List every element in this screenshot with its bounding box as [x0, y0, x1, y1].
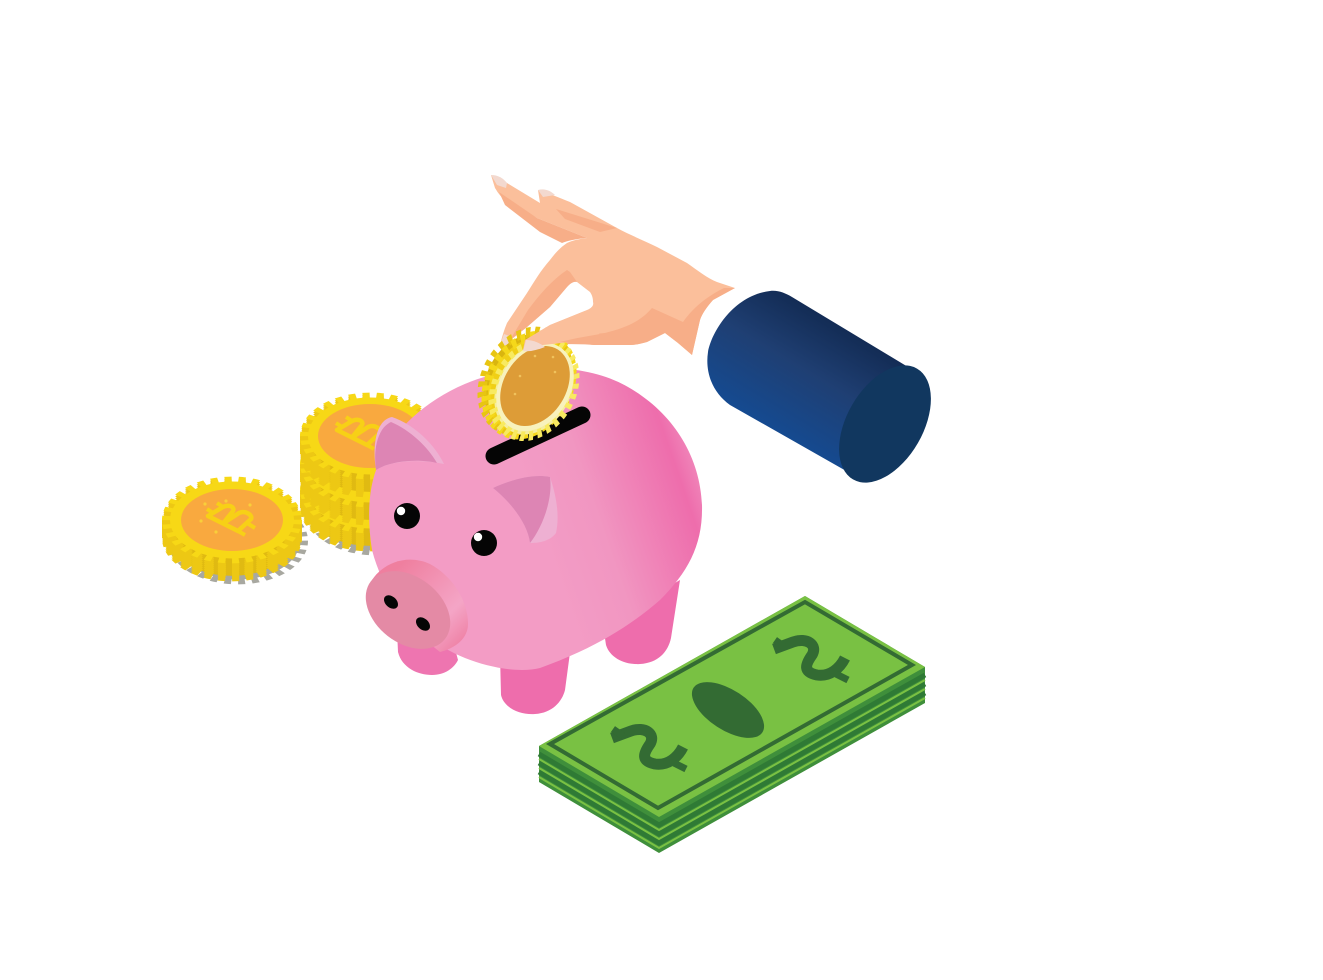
snout: [351, 555, 468, 665]
thumb over coin: [523, 311, 615, 351]
nostril: right: [413, 615, 433, 633]
fingernail: middle: [538, 189, 555, 197]
piggy bank: [351, 368, 702, 714]
sleeve: navy jacket cuff: [707, 291, 950, 498]
eye: right: [471, 530, 497, 556]
dollar sign: left: [612, 729, 686, 769]
bill centre oval: [683, 671, 773, 749]
pig leg: front: [500, 645, 571, 714]
pig ear: near: [493, 476, 558, 543]
eye: left: [394, 503, 420, 529]
finger shadow: [499, 192, 617, 340]
pig leg: back left: [397, 630, 458, 675]
nostril: left: [381, 593, 401, 611]
coin dropping into slot: [465, 316, 592, 451]
sleeve end cap: [820, 350, 950, 498]
coin: single bitcoin coin at front left: [168, 480, 302, 581]
bill layer edges: [539, 596, 925, 853]
hand holding coin: [491, 175, 735, 355]
cash stack: [539, 596, 925, 853]
fingernail: pinching finger: [500, 334, 512, 349]
coin slot: [494, 415, 582, 456]
pig body: [369, 368, 702, 670]
fingernail: index: [491, 175, 507, 188]
pig ear: far: [375, 417, 444, 470]
palm shadow: [530, 288, 735, 355]
dollar sign: right: [774, 640, 848, 680]
bill border: [550, 602, 912, 808]
bill top face: [539, 596, 925, 817]
coin stack: three bitcoin coins behind the pig: [306, 396, 440, 552]
pig leg: back right: [603, 580, 680, 664]
